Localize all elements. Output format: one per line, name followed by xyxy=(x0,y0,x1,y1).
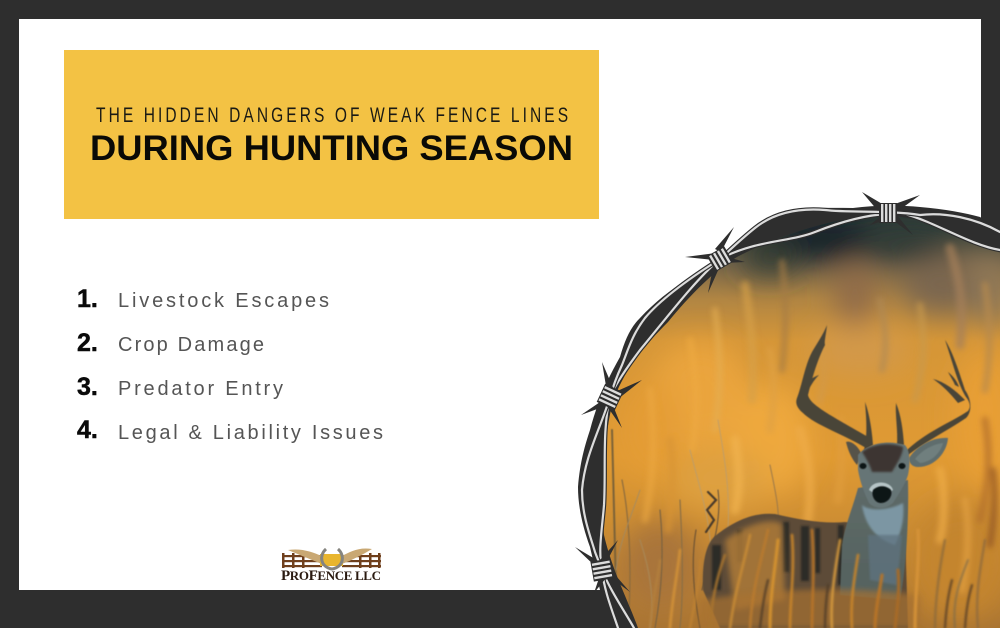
item 3 xyxy=(77,373,283,401)
item 3: 3. xyxy=(77,373,98,401)
left antler xyxy=(796,325,873,450)
forehead xyxy=(862,444,903,472)
item 3: Predator Entry xyxy=(118,378,283,400)
throat patch xyxy=(862,503,903,545)
chest xyxy=(868,535,902,585)
icon: horseshoe xyxy=(322,549,342,569)
title line two: DURING HUNTING SEASON xyxy=(90,129,573,168)
barb knot bottom left xyxy=(575,540,630,593)
item 1: Livestock Escapes xyxy=(118,290,329,312)
icon: longhorn horns xyxy=(288,549,372,564)
muzzle highlight xyxy=(869,482,893,492)
item 2 xyxy=(77,329,264,357)
dark wire ring backing xyxy=(578,206,1000,628)
right antler xyxy=(896,340,970,455)
deer photo xyxy=(590,200,1000,628)
logo wordmark: PROFENCE LLC xyxy=(281,568,381,584)
barbed wire xyxy=(582,210,1000,628)
right ear xyxy=(909,438,948,467)
lower grass veil xyxy=(700,590,920,628)
deer head xyxy=(858,443,910,508)
barb knot top xyxy=(862,192,920,235)
photo background xyxy=(590,200,1000,628)
item 2: Crop Damage xyxy=(118,334,264,356)
nose xyxy=(872,486,891,503)
body stripes xyxy=(712,522,844,590)
foreground grass xyxy=(650,530,985,628)
item 4 xyxy=(77,416,383,444)
icon: fence rails xyxy=(282,553,381,568)
deer body xyxy=(703,514,908,628)
blurred tall grass xyxy=(645,248,994,590)
title line one: THE HIDDEN DANGERS OF WEAK FENCE LINES xyxy=(96,103,568,127)
barb knot upper left xyxy=(685,227,745,293)
barb knot left xyxy=(581,362,642,428)
wire strand A xyxy=(600,214,1000,628)
numbered list xyxy=(77,285,383,444)
left ear xyxy=(846,442,862,465)
eyes xyxy=(860,463,906,469)
item 2: 2. xyxy=(77,329,98,357)
deer neck xyxy=(840,480,908,600)
title banner xyxy=(64,50,599,219)
item 4: Legal & Liability Issues xyxy=(118,422,383,444)
item 1: 1. xyxy=(77,285,98,313)
blurred field tones xyxy=(620,216,1000,620)
item 4: 4. xyxy=(77,416,98,444)
body lit grass patch xyxy=(725,521,785,610)
item 1 xyxy=(77,285,329,313)
icon: yellow centre xyxy=(320,554,343,566)
mid grass stems xyxy=(612,420,778,628)
right ear inner xyxy=(915,443,943,463)
wire strand B xyxy=(582,210,1000,628)
ProFence logo xyxy=(281,549,381,584)
